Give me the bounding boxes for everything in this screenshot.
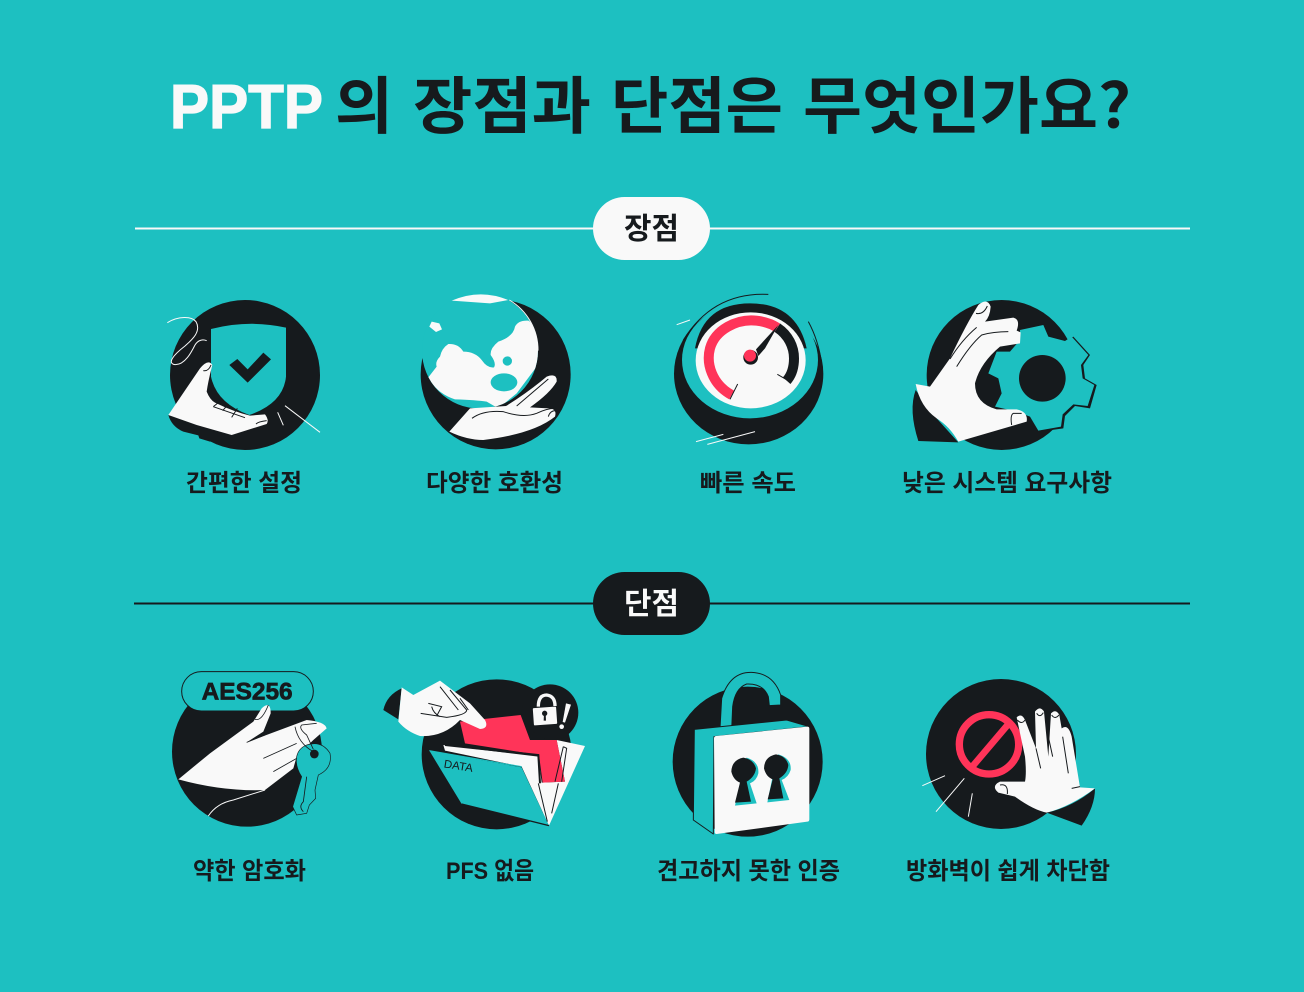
icon: speed gauge	[674, 294, 823, 444]
title: 장점과	[413, 73, 591, 142]
icon: hand holding gear	[913, 300, 1097, 450]
icon: data folder	[383, 679, 585, 829]
icon: globe in hand	[421, 293, 571, 449]
icon: open lock	[533, 695, 571, 729]
label: 빠른 속도: 빠른 속도	[700, 470, 796, 497]
icon: blocking hand	[922, 679, 1095, 829]
label: 견고하지 못한 인증: 견고하지 못한 인증	[657, 858, 840, 885]
section header: 단점: 단점	[624, 588, 679, 621]
label: 약한 암호화: 약한 암호화	[193, 858, 306, 885]
section header: 장점: 장점	[624, 213, 679, 246]
icon: AES256 key in hand	[172, 672, 330, 827]
title: PPTP	[170, 73, 323, 142]
title	[170, 56, 1131, 146]
title: 의	[335, 73, 393, 142]
section header: 장점	[135, 197, 1190, 260]
label: 방화벽이 쉽게 차단함: 방화벽이 쉽게 차단함	[906, 858, 1110, 885]
badge: AES256	[182, 672, 313, 711]
title: 무엇인가요?	[803, 56, 1131, 146]
badge: AES256: AES256	[202, 678, 293, 705]
label: 낮은 시스템 요구사항: 낮은 시스템 요구사항	[902, 470, 1112, 497]
title: 단점은	[611, 73, 783, 142]
text: DATA: DATA	[443, 758, 474, 775]
icon: shield in hand	[167, 300, 320, 450]
section header: 단점	[134, 572, 1190, 635]
icon: padlock with keyholes	[673, 672, 823, 837]
label: 간편한 설정: 간편한 설정	[186, 470, 302, 497]
label: PFS 없음: PFS 없음	[446, 858, 534, 885]
label: 다양한 호환성: 다양한 호환성	[426, 470, 563, 497]
icon: prohibition sign	[959, 715, 1019, 774]
